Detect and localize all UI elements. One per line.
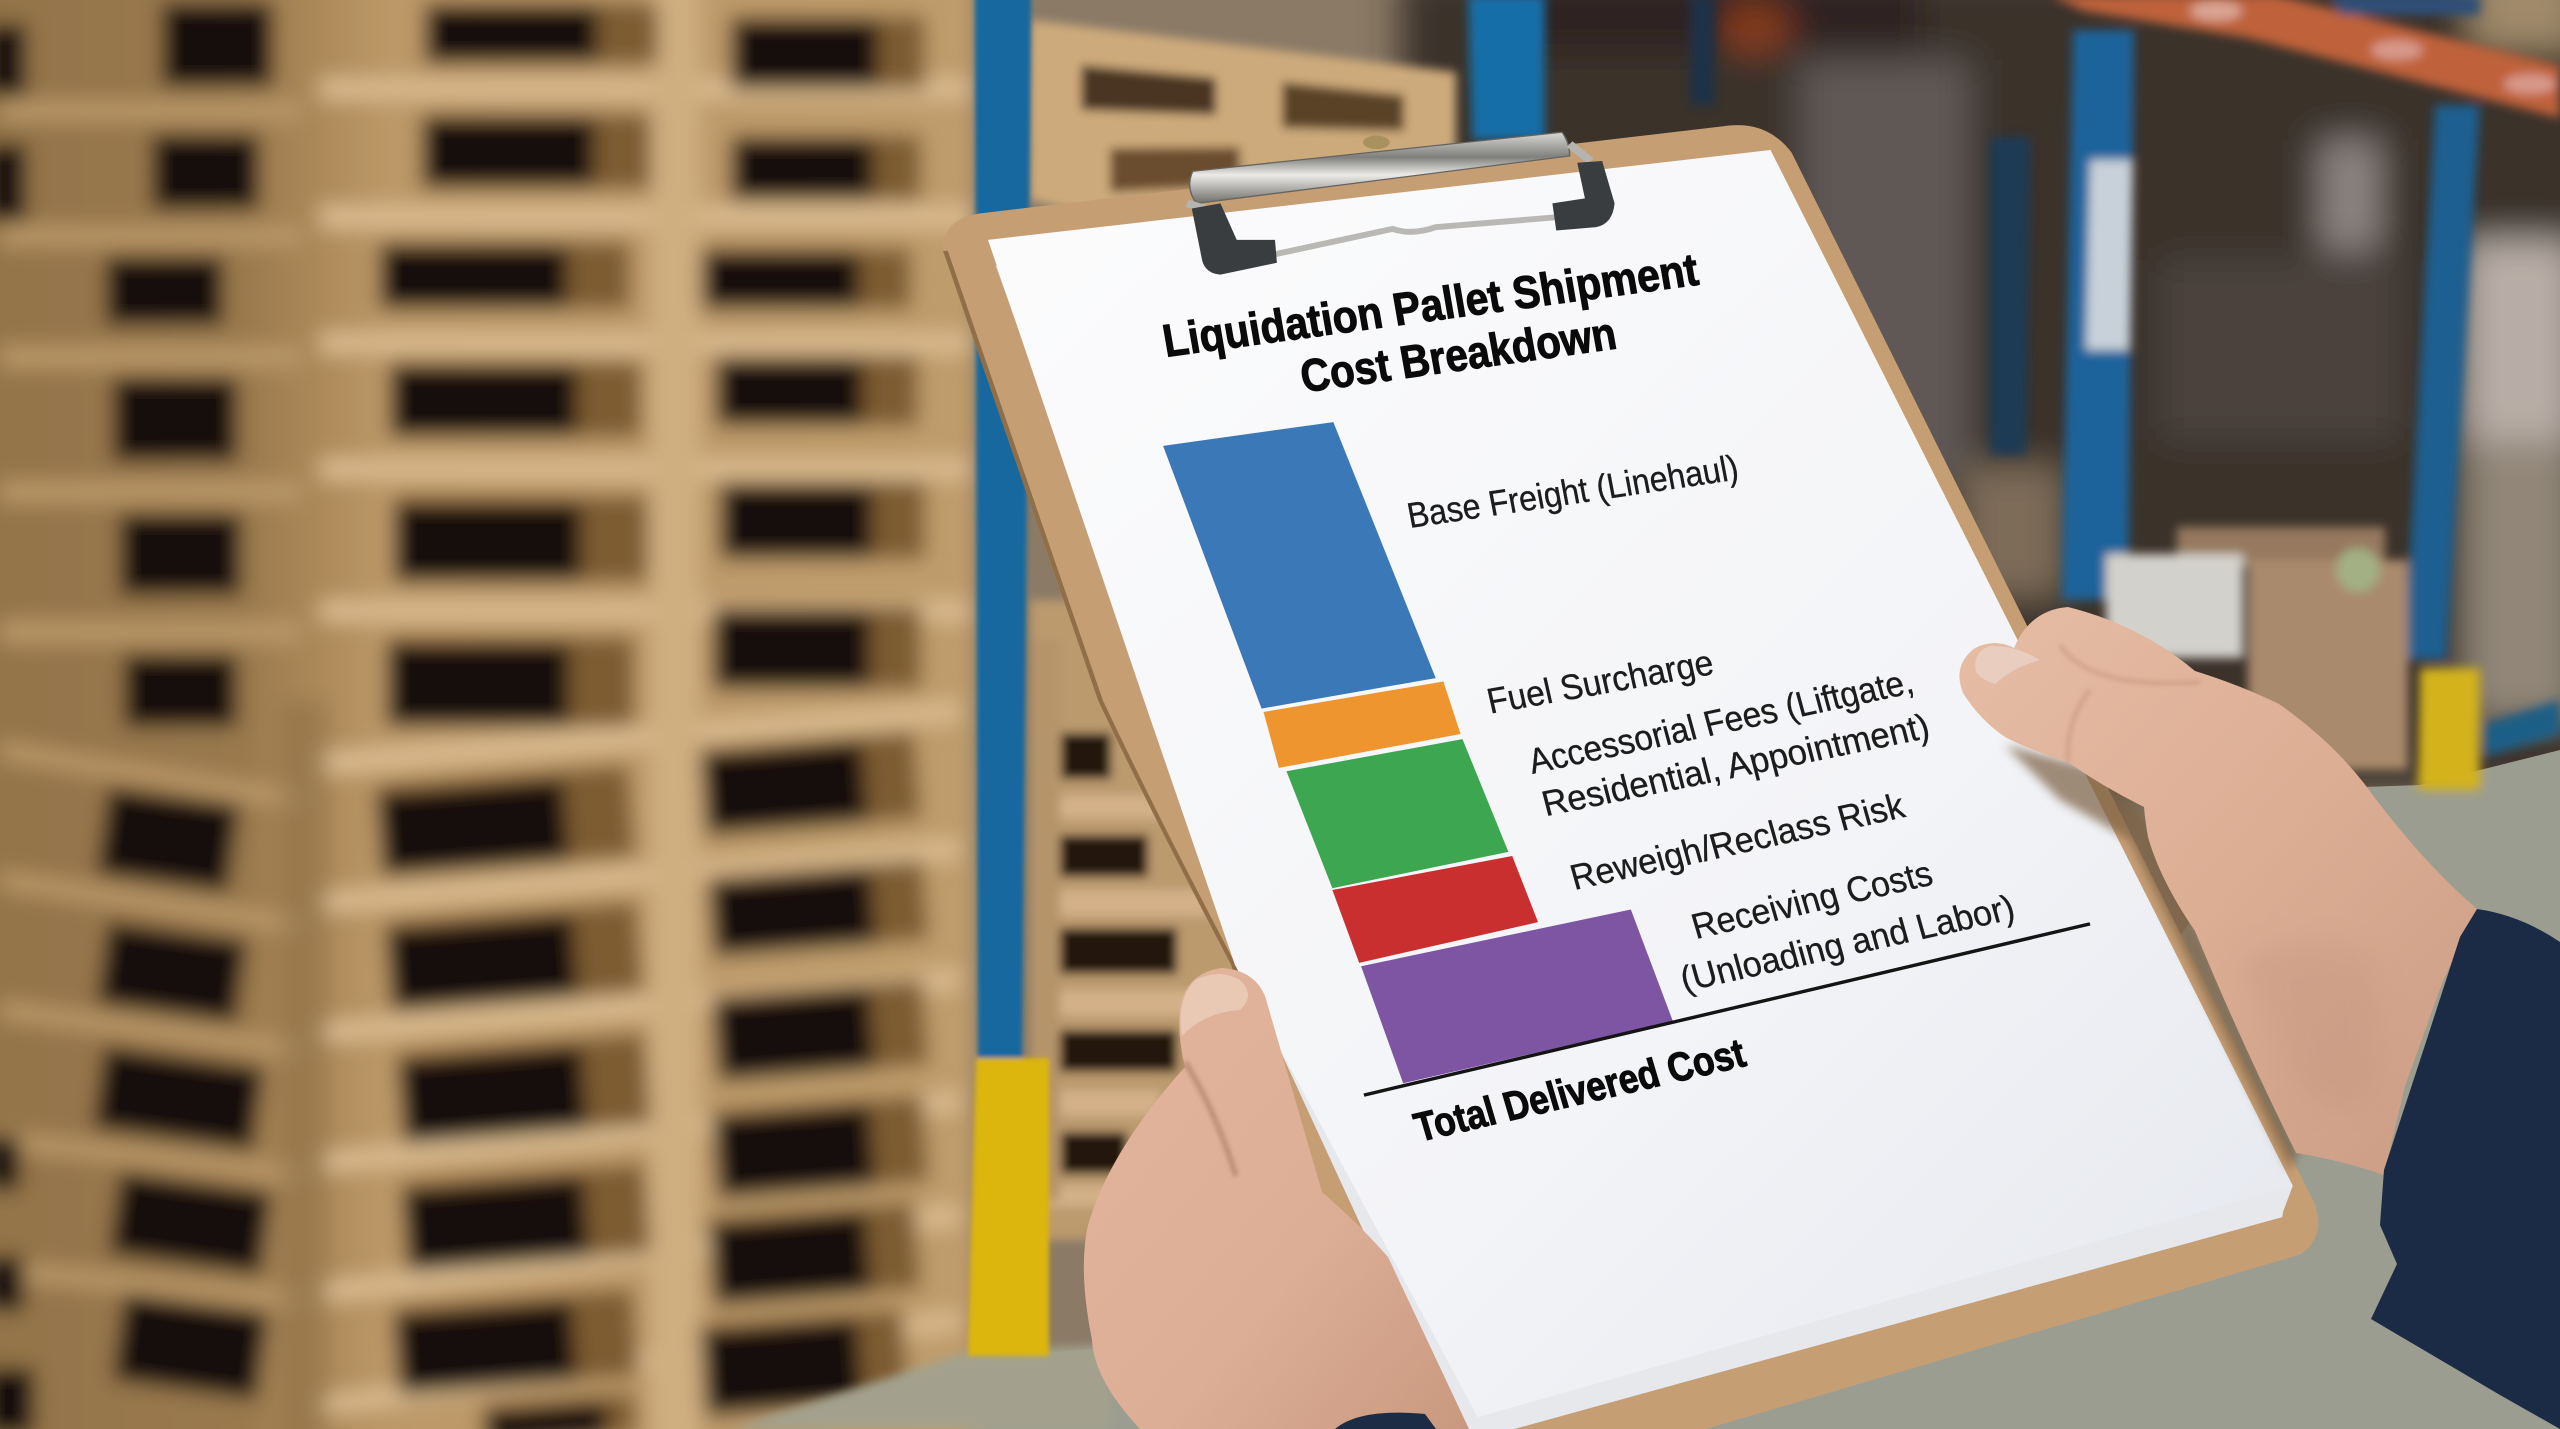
hole outers	[382, 9, 923, 1429]
label: accessorial fees: Accessorial Fees (Liftgate,	[1524, 662, 1918, 782]
right hand	[1959, 607, 2560, 1429]
baseline	[1364, 924, 2090, 1095]
clip arms	[1187, 144, 1591, 208]
clip wire	[1275, 217, 1560, 254]
right hand shape	[1959, 607, 2477, 1175]
bar: receiving costs	[1361, 909, 1673, 1083]
clipboard board	[943, 125, 2318, 1429]
warehouse backdrop	[1400, 0, 2560, 790]
shadow under right hand	[2005, 745, 2300, 1170]
label: accessorial fees	[1524, 662, 1934, 824]
label: receiving costs: Receiving Costs	[1687, 854, 1937, 947]
right hand web crease	[2060, 645, 2200, 762]
label: reweigh risk: Reweigh/Reclass Risk	[1566, 786, 1910, 898]
pallet stack main	[0, 0, 975, 1429]
left thumb nail	[1181, 974, 1248, 1036]
blue upright and yellow guard	[968, 0, 1049, 1356]
bar: reweigh risk	[1332, 856, 1538, 963]
stacked cost chart	[1163, 422, 2090, 1095]
warehouse racking and boxes	[1468, 0, 2560, 790]
left hand crease	[1185, 1062, 1236, 1176]
bar: accessorial fees	[1286, 739, 1508, 888]
floor in front of pallets	[730, 1345, 1110, 1429]
label: accessorial fees: Residential, Appointment)	[1538, 707, 1934, 824]
left hand	[1084, 968, 1469, 1429]
metal clip	[1187, 132, 1615, 275]
clipboard	[943, 125, 2318, 1429]
bar: base freight	[1163, 422, 1436, 709]
hole cores	[0, 9, 872, 1429]
floor	[960, 750, 2560, 1429]
label: fuel surcharge: Fuel Surcharge	[1483, 643, 1717, 722]
label: receiving costs: (Unloading and Labor)	[1676, 888, 2019, 1000]
right thumb nail	[1975, 646, 2040, 684]
bar: fuel surcharge	[1264, 681, 1461, 768]
title: Cost Breakdown	[1297, 308, 1620, 403]
clip left handle	[1192, 203, 1277, 275]
right hand shading	[2240, 942, 2383, 1107]
title: Liquidation Pallet Shipment	[1159, 245, 1702, 367]
right sleeve	[2371, 909, 2560, 1429]
clip bolt	[1363, 136, 1390, 149]
pallets behind	[1030, 20, 1456, 1240]
label: base freight: Base Freight (Linehaul)	[1404, 449, 1742, 536]
paper sheets below	[996, 265, 2293, 1429]
clip bar	[1190, 132, 1570, 203]
title	[1159, 245, 1702, 403]
paper top sheet	[988, 150, 2293, 1417]
clipboard left edge shading	[943, 251, 1383, 1429]
left hand shape	[1084, 968, 1469, 1429]
left sleeve	[1335, 1413, 1436, 1429]
total label: Total Delivered Cost	[1409, 1031, 1751, 1151]
clip right handle	[1552, 161, 1615, 231]
